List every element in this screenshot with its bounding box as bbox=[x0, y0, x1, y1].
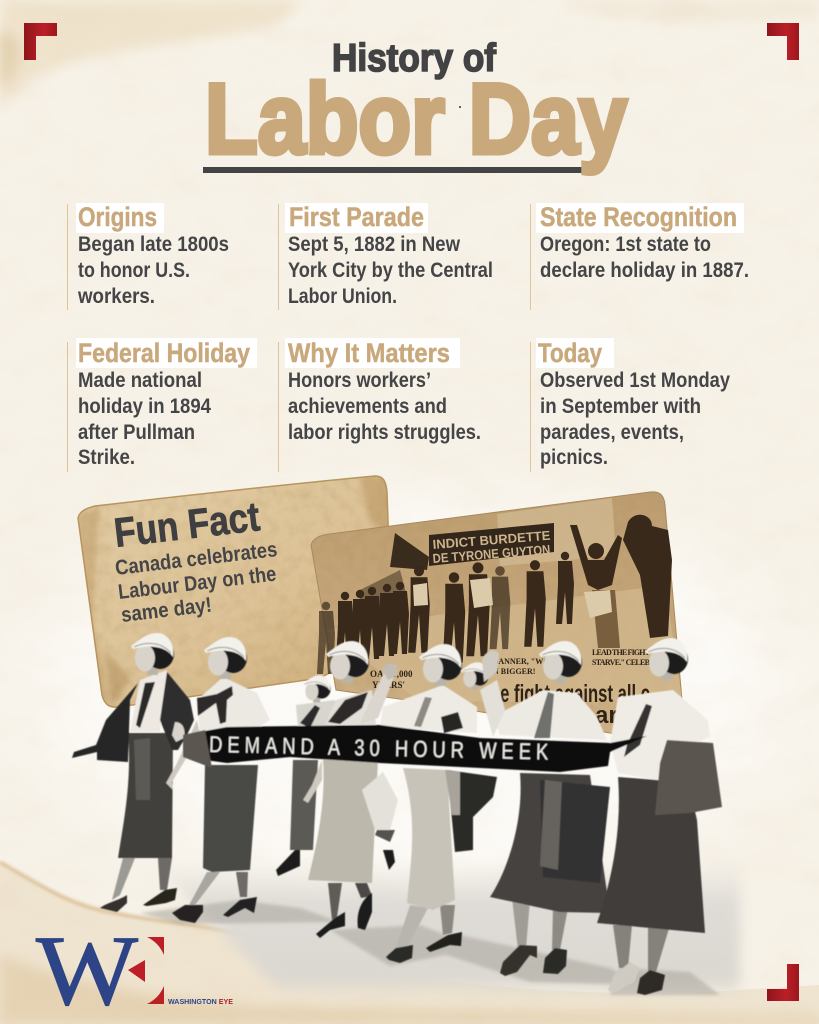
corner bracket: bottom right bbox=[767, 964, 799, 1001]
panel: Origins: to honor U.S. bbox=[78, 258, 190, 282]
photo: newspaper caption: ary bbox=[595, 702, 632, 729]
road and shadows bbox=[140, 860, 740, 1000]
photo: protest banner: INDICT BURDETTE bbox=[432, 528, 551, 552]
photo: newspaper caption bbox=[370, 648, 651, 729]
text: fun fact body: Canada celebrates bbox=[114, 538, 278, 580]
panel: First Parade: York City by the Central bbox=[288, 258, 493, 282]
photo: newspaper caption: he fight against all c bbox=[490, 680, 650, 708]
panel: First Parade: Labor Union. bbox=[288, 284, 397, 308]
title line: Labor Day: Labor Day bbox=[205, 63, 627, 174]
photo: newspaper caption: STARVE." CELEB bbox=[592, 658, 651, 667]
panel: Federal Holiday: Strike. bbox=[78, 445, 135, 469]
photo: flag bbox=[390, 533, 429, 570]
banner: Demand a 30 hour week: DEMAND A 30 HOUR WEEK bbox=[209, 732, 549, 765]
panel: Why It Matters: labor rights struggles. bbox=[288, 420, 481, 444]
panel: Origins bbox=[76, 202, 229, 308]
woman: right with carried bag bbox=[597, 638, 722, 995]
title underline bbox=[203, 167, 587, 173]
corner bracket: top right bbox=[767, 23, 799, 60]
panel: Today: in September with bbox=[540, 394, 701, 418]
panel: First Parade: First Parade bbox=[289, 202, 424, 232]
banner: Demand a 30 hour week bbox=[183, 725, 647, 772]
photo: newspaper caption: BANNER, "WORK bbox=[493, 657, 562, 666]
woman: bow blouse bbox=[166, 637, 270, 923]
logo: E shapes bbox=[128, 937, 164, 1004]
woman: dark jacket bbox=[72, 633, 194, 912]
speck bbox=[459, 106, 461, 108]
card: aged texture bbox=[78, 477, 388, 706]
panel: Federal Holiday: Federal Holiday bbox=[78, 338, 250, 368]
panel: State Recognition bbox=[536, 202, 749, 282]
panel: State Recognition: State Recognition bbox=[540, 202, 737, 232]
panel: State Recognition: Oregon: 1st state to bbox=[540, 232, 711, 256]
panel: Today bbox=[536, 338, 730, 469]
woman: light dress with bag bbox=[303, 641, 398, 938]
photo: newspaper caption: YEARS' bbox=[372, 680, 405, 690]
panel: Today: picnics. bbox=[540, 445, 608, 469]
text: fun fact body bbox=[114, 538, 278, 627]
panel: Origins: workers. bbox=[77, 284, 155, 308]
illustration: marching women with banner bbox=[72, 633, 722, 995]
logo: W monogram: W bbox=[36, 915, 139, 1024]
photo: newspaper caption: LEAD THE FIGHT bbox=[592, 648, 651, 657]
panel: Today: Today bbox=[538, 338, 602, 368]
panel: Federal Holiday: Made national bbox=[78, 368, 202, 392]
title bbox=[203, 37, 627, 174]
panel: Today: parades, events, bbox=[540, 420, 684, 444]
panel: Why It Matters: achievements and bbox=[288, 394, 447, 418]
panel: First Parade bbox=[285, 202, 493, 308]
panel: Origins: Began late 1800s bbox=[78, 232, 229, 256]
panel: Federal Holiday: holiday in 1894 bbox=[78, 394, 211, 418]
panel: Why It Matters: Why It Matters bbox=[288, 338, 450, 368]
logo: Washington Eye bbox=[36, 915, 233, 1024]
corner bracket: top left bbox=[24, 23, 57, 60]
title line: History of: History of bbox=[332, 37, 497, 80]
panel: fun fact card bbox=[77, 475, 389, 708]
panel: Federal Holiday: after Pullman bbox=[78, 420, 195, 444]
panel: Federal Holiday bbox=[76, 338, 257, 469]
panel: Why It Matters: Honors workers’ bbox=[288, 368, 431, 392]
woman: skirt with carried coat bbox=[380, 644, 497, 963]
photo: grain bbox=[514, 702, 518, 704]
photo: light sign bbox=[497, 498, 616, 566]
photo: protest banner bbox=[429, 523, 554, 566]
woman: back left bbox=[276, 675, 335, 876]
text: fun fact body: Labour Day on the bbox=[117, 563, 277, 604]
photo: light clothing bbox=[413, 578, 612, 618]
text: fun fact body: same day! bbox=[120, 594, 213, 627]
heading: Fun Fact: Fun Fact bbox=[112, 493, 262, 556]
photo: ground bbox=[325, 585, 682, 702]
panel: Why It Matters bbox=[285, 338, 481, 444]
woman: back centre bbox=[461, 662, 489, 690]
panel: newspaper protest photo bbox=[305, 485, 690, 740]
panel: Today: Observed 1st Monday bbox=[540, 368, 730, 392]
panel: Origins: Origins bbox=[78, 202, 157, 232]
logo: wordmark: WASHINGTON EYE bbox=[168, 997, 233, 1006]
panel: First Parade: Sept 5, 1882 in New bbox=[288, 232, 460, 256]
panel: State Recognition: declare holiday in 1887. bbox=[540, 258, 749, 282]
woman: raised fist, tie bbox=[480, 641, 610, 976]
photo: newspaper caption: OAD 1,000 bbox=[370, 669, 413, 679]
photo: marchers bbox=[317, 515, 672, 674]
photo: newspaper caption: N BIGGER! bbox=[493, 667, 535, 676]
column rules bbox=[67, 204, 531, 472]
photo: protest banner: DE TYRONE GUYTON bbox=[432, 542, 551, 566]
